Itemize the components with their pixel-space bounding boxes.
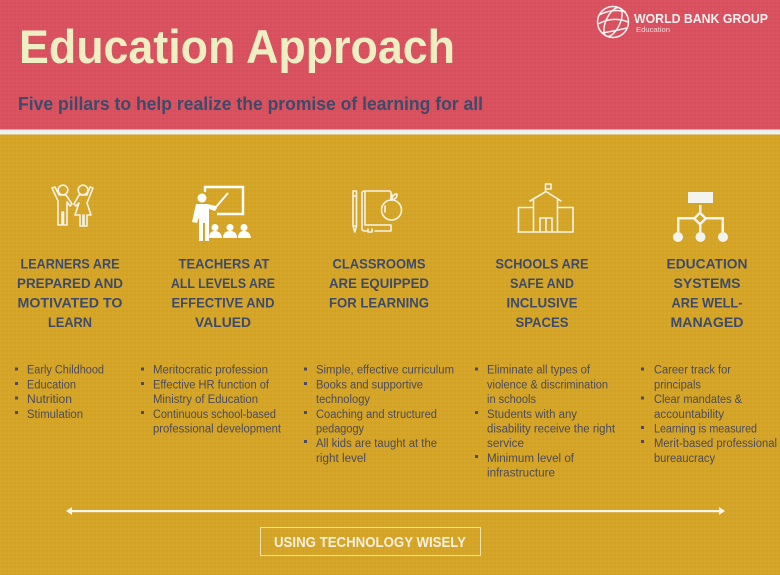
subtitle: Five pillars to help realize the promise of learning for all [18, 94, 483, 114]
logo: World Bank Group Education [598, 5, 768, 39]
list: schools: Eliminate all types of [487, 364, 591, 376]
list: teachers: Continuous school-based [153, 409, 276, 421]
icon: teacher at board [192, 187, 251, 241]
list: schools: violence & discrimination [487, 380, 608, 392]
heading: teachers [171, 256, 275, 330]
heading: teachers: TEACHERS AT [178, 256, 270, 272]
heading: teachers: ALL LEVELS ARE [171, 275, 275, 291]
heading: learners: LEARN [48, 314, 92, 330]
heading: classrooms: FOR LEARNING [329, 294, 429, 310]
heading: learners: MOTIVATED TO [18, 294, 123, 310]
list: classrooms: Simple, effective curriculum [316, 364, 454, 376]
list: classrooms: pedagogy [316, 424, 364, 436]
list: learners [15, 364, 104, 421]
heading: education systems: MANAGED [670, 314, 744, 330]
list: classrooms: Books and supportive [316, 380, 423, 392]
heading: schools [496, 256, 588, 330]
heading: learners: PREPARED AND [17, 275, 123, 291]
heading: education systems: ARE WELL- [672, 294, 743, 310]
heading: classrooms: ARE EQUIPPED [329, 275, 429, 291]
white divider band [0, 130, 780, 134]
list: teachers: Ministry of Education [153, 394, 258, 406]
list: education systems: Clear mandates & [654, 394, 742, 406]
heading: schools: SCHOOLS ARE [496, 256, 588, 272]
icon: school building [518, 184, 573, 232]
icon: learners [52, 185, 93, 226]
list: schools: in schools [487, 394, 536, 406]
list: schools [475, 364, 616, 480]
list: education systems: Career track for [654, 364, 731, 376]
list: learners: Education [27, 380, 76, 392]
icon: system hierarchy [673, 192, 728, 242]
panel: pillars background [0, 134, 780, 575]
heading: schools: SPACES [516, 314, 568, 330]
list: education systems: Learning is measured [654, 424, 757, 436]
list: schools: Students with any [487, 409, 577, 421]
heading: education systems: SYSTEMS [674, 275, 740, 291]
list: teachers: Effective HR function of [153, 380, 270, 392]
list: education systems: bureaucracy [654, 453, 715, 465]
list: education systems: accountability [654, 409, 724, 421]
callout: using technology wisely: USING TECHNOLOGY WISELY [274, 535, 466, 551]
list: schools: disability receive the right [487, 424, 616, 436]
title: Education Approach [19, 20, 455, 73]
heading: classrooms [329, 256, 429, 310]
heading: classrooms: CLASSROOMS [332, 256, 426, 272]
list: classrooms: Coaching and structured [316, 409, 437, 421]
list: learners: Early Childhood [27, 364, 104, 376]
list: education systems [641, 364, 777, 465]
list: schools: service [487, 438, 524, 450]
heading: education systems: EDUCATION [666, 256, 748, 272]
icon: book, pencil and apple [353, 191, 402, 232]
heading: education systems [666, 256, 748, 330]
logo: World Bank Group Education: WORLD BANK GROUP [634, 12, 768, 26]
list: learners: Stimulation [27, 409, 83, 421]
callout: using technology wisely [260, 528, 480, 556]
list: schools: Minimum level of [487, 453, 575, 465]
arrow: double-headed technology span [66, 507, 725, 515]
list: schools: infrastructure [487, 468, 555, 480]
list: learners: Nutrition [27, 394, 72, 406]
heading: learners: LEARNERS ARE [20, 256, 120, 272]
panel: header band [0, 0, 780, 130]
list: education systems: Merit-based professional [654, 438, 777, 450]
list: classrooms [304, 364, 454, 465]
list: classrooms: technology [316, 394, 370, 406]
logo: World Bank Group Education: Education [636, 25, 670, 34]
heading: teachers: EFFECTIVE AND [172, 294, 274, 310]
list: teachers: Meritocratic profession [153, 364, 268, 376]
heading: teachers: VALUED [195, 314, 251, 330]
list: classrooms: right level [316, 453, 366, 465]
list: classrooms: All kids are taught at the [316, 438, 437, 450]
heading: schools: SAFE AND [510, 275, 574, 291]
list: education systems: principals [654, 380, 701, 392]
heading: learners [17, 256, 123, 330]
list: teachers [141, 364, 282, 436]
heading: schools: INCLUSIVE [506, 294, 578, 310]
list: teachers: professional development [153, 424, 282, 436]
